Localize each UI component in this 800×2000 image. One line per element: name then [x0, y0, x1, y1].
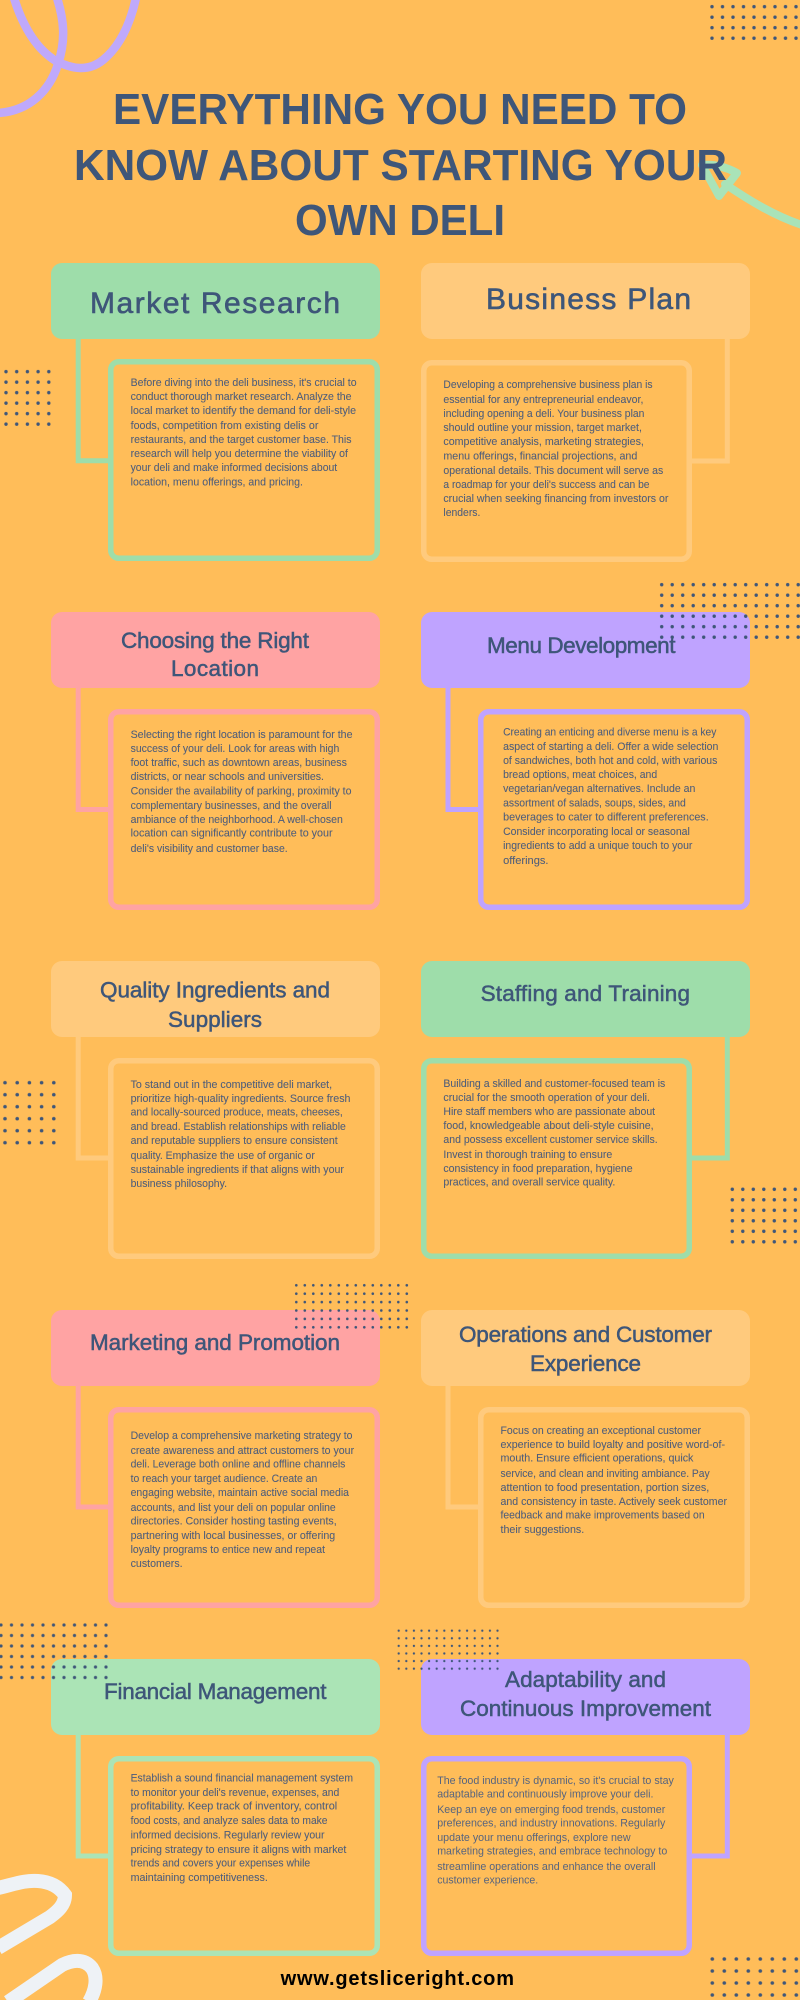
- title: OWN DELI: [295, 197, 505, 245]
- title: EVERYTHING YOU NEED TO: [113, 86, 687, 134]
- text block: quality ingredients: and locally-sourced produce, meats, cheeses,: [131, 1107, 343, 1119]
- text block: staffing and training: crucial for the smooth operation of your deli.: [443, 1092, 650, 1104]
- text block: quality ingredients: business philosophy.: [131, 1178, 227, 1190]
- text block: menu development: Creating an enticing and diverse menu is a key: [503, 727, 717, 739]
- heading: operations and customer experience: [421, 1310, 750, 1386]
- text block: business plan: essential for any entrepreneurial endeavor,: [443, 394, 643, 406]
- text block: marketing: directories. Consider hosting tasting events,: [131, 1516, 337, 1528]
- heading: menu development: [421, 612, 750, 688]
- text block: menu development: assortment of salads, soups, sides, and: [503, 798, 686, 810]
- text block: menu development: ingredients to add a unique touch to your: [503, 840, 693, 852]
- text block: location: ambiance of the neighborhood. A well-chosen: [131, 814, 343, 826]
- text block: financial management: to monitor your deli's revenue, expenses, and: [131, 1787, 339, 1799]
- heading: adaptability and continuous improvement: Continuous Improvement: [460, 1696, 712, 1721]
- title: [74, 86, 727, 245]
- panel: business plan: [421, 263, 750, 559]
- text block: quality ingredients: To stand out in the competitive deli market,: [131, 1079, 332, 1091]
- heading: adaptability and continuous improvement: Adaptability and: [505, 1667, 666, 1692]
- text block: business plan: lenders.: [443, 507, 480, 519]
- text block: operations: experience to build loyalty and positive word-of-: [500, 1439, 725, 1451]
- text block: operations: service, and clean and inviting ambiance. Pay: [500, 1468, 710, 1480]
- decoration: dot grid over menu heading: [656, 579, 800, 642]
- text block: location: [111, 712, 377, 907]
- connector: [448, 1386, 480, 1507]
- text block: menu development: bread options, meat choices, and: [503, 769, 657, 781]
- text block: financial management: profitability. Keep track of inventory, control: [131, 1801, 337, 1813]
- text block: adaptability: [424, 1759, 689, 1953]
- text block: operations: attention to food presentation, portion sizes,: [500, 1482, 709, 1494]
- text block: operations: [481, 1410, 747, 1605]
- text block: staffing and training: Invest in thorough training to ensure: [443, 1149, 612, 1161]
- text block: market research: research will help you determine the viability of: [131, 448, 349, 460]
- text block: staffing and training: consistency in food preparation, hygiene: [443, 1163, 633, 1175]
- text block: quality ingredients: quality. Emphasize the use of organic or: [131, 1150, 315, 1162]
- decoration: dot grid top right: [707, 1, 800, 43]
- text block: menu development: offerings.: [503, 855, 548, 867]
- text block: financial management: pricing strategy to ensure it aligns with market: [131, 1844, 347, 1856]
- text block: market research: foods, competition from existing delis or: [131, 420, 319, 432]
- heading: quality ingredients and suppliers: [51, 961, 380, 1037]
- text block: location: success of your deli. Look for areas with high: [131, 743, 339, 755]
- text block: location: foot traffic, such as downtown areas, business: [131, 757, 347, 769]
- text block: financial management: Establish a sound financial management system: [131, 1773, 353, 1785]
- panel: quality ingredients and suppliers: [51, 961, 380, 1256]
- heading: business plan: Business Plan: [486, 283, 691, 316]
- text block: market research: conduct thorough market research. Analyze the: [131, 391, 352, 403]
- heading: choosing the right location: [51, 612, 380, 688]
- text block: location: districts, or near schools and universities.: [131, 771, 324, 783]
- text block: adaptability: adaptable and continuously improve your deli.: [437, 1789, 654, 1801]
- text block: market research: Before diving into the deli business, it's crucial to: [131, 377, 357, 389]
- text block: quality ingredients: and bread. Establish relationships with reliable: [131, 1121, 346, 1133]
- text block: location: Consider the availability of parking, proximity to: [131, 786, 352, 798]
- text block: menu development: vegetarian/vegan alternatives. Include an: [503, 783, 695, 795]
- heading: menu development: Menu Development: [487, 633, 676, 658]
- connector: [78, 1037, 110, 1158]
- text block: location: Selecting the right location is paramount for the: [131, 729, 352, 741]
- text block: adaptability: customer experience.: [437, 1875, 538, 1887]
- text block: operations: feedback and make improvements based on: [500, 1510, 705, 1522]
- decoration: white brush strokes: [0, 1881, 96, 2000]
- decoration: green arrow: [702, 165, 800, 225]
- text block: business plan: should outline your mission, target market,: [443, 422, 642, 434]
- decoration: dot grid over marketing heading: [292, 1281, 411, 1332]
- text block: marketing: engaging website, maintain active social media: [131, 1487, 350, 1499]
- text block: adaptability: streamline operations and enhance the overall: [437, 1861, 656, 1873]
- text block: location: complementary businesses, and the overall: [131, 800, 332, 812]
- text block: market research: location, menu offerings, and pricing.: [131, 477, 303, 489]
- panel: operations and customer experience: [421, 1310, 750, 1605]
- text block: staffing and training: Hire staff members who are passionate about: [443, 1106, 656, 1118]
- decoration: dot grid right lower: [727, 1184, 800, 1247]
- heading: staffing and training: Staffing and Training: [481, 981, 690, 1006]
- text block: staffing and training: food, knowledgeable about deli-style cuisine,: [443, 1120, 654, 1132]
- text block: operations: Focus on creating an exceptional customer: [500, 1425, 701, 1437]
- panel: choosing the right location: [51, 612, 380, 907]
- heading: choosing the right location: Choosing the Right: [121, 628, 310, 653]
- text block: marketing: deli. Leverage both online and offline channels: [131, 1459, 346, 1471]
- text block: quality ingredients: prioritize high-quality ingredients. Source fresh: [131, 1093, 350, 1105]
- heading: business plan: [421, 263, 750, 339]
- decoration: dot grid over adaptability heading: [395, 1627, 501, 1672]
- text block: marketing: accounts, and list your deli on popular online: [131, 1502, 336, 1514]
- text block: quality ingredients: [111, 1061, 377, 1256]
- text block: staffing and training: practices, and overall service quality.: [443, 1177, 615, 1189]
- panel: menu development: [421, 612, 750, 907]
- panel: staffing and training: [421, 961, 750, 1256]
- text block: adaptability: update your menu offerings, explore new: [437, 1832, 631, 1844]
- text block: menu development: Consider incorporating local or seasonal: [503, 826, 690, 838]
- text block: quality ingredients: and reputable suppliers to ensure consistent: [131, 1135, 339, 1147]
- text block: marketing: Develop a comprehensive marketing strategy to: [131, 1430, 352, 1442]
- heading: staffing and training: [421, 961, 750, 1037]
- text block: market research: restaurants, and the target customer base. This: [131, 434, 352, 446]
- text block: business plan: including opening a deli. Your business plan: [443, 408, 644, 420]
- connector: [690, 339, 727, 461]
- connector: [690, 1735, 727, 1856]
- text block: business plan: a roadmap for your deli's success and can be: [443, 479, 650, 491]
- text block: marketing: create awareness and attract customers to your: [131, 1445, 354, 1457]
- connector: [690, 1037, 727, 1158]
- decoration: dot grid left lower: [0, 1077, 60, 1149]
- text block: business plan: competitive analysis, marketing strategies,: [443, 436, 644, 448]
- text block: market research: [111, 362, 377, 558]
- decoration: dot grid left: [1, 366, 54, 429]
- text block: financial management: food costs, and analyze sales data to make: [131, 1815, 328, 1827]
- text block: financial management: trends and covers your expenses while: [131, 1858, 310, 1870]
- text block: marketing: to reach your target audience. Create an: [131, 1473, 317, 1485]
- text block: adaptability: preferences, and industry innovations. Regularly: [437, 1818, 666, 1830]
- decoration: dot grid over financial heading: [0, 1620, 111, 1683]
- text block: business plan: menu offerings, financial projections, and: [443, 450, 637, 462]
- heading: marketing and promotion: Marketing and Promotion: [90, 1330, 340, 1355]
- text block: financial management: [111, 1759, 377, 1953]
- heading: market research: [51, 263, 380, 339]
- text block: menu development: [481, 712, 747, 907]
- heading: quality ingredients and suppliers: Suppliers: [168, 1007, 262, 1032]
- heading: financial management: Financial Management: [104, 1679, 327, 1704]
- text block: business plan: crucial when seeking financing from investors or: [443, 493, 669, 505]
- heading: marketing and promotion: [51, 1310, 380, 1386]
- decoration: purple scribble: [0, 0, 136, 113]
- heading: operations and customer experience: Experience: [530, 1351, 641, 1376]
- text block: menu development: beverages to cater to different preferences.: [503, 812, 709, 824]
- heading: financial management: [51, 1659, 380, 1735]
- text block: adaptability: marketing strategies, and embrace technology to: [437, 1846, 667, 1858]
- website footer: www.getsliceright.com: [280, 1968, 514, 1990]
- connector: [78, 688, 110, 810]
- panel: market research: [51, 263, 380, 558]
- text block: location: deli's visibility and customer base.: [131, 843, 288, 855]
- title: KNOW ABOUT STARTING YOUR: [74, 142, 727, 190]
- text block: staffing and training: and possess excellent customer service skills.: [443, 1134, 658, 1146]
- text block: market research: your deli and make informed decisions about: [131, 462, 338, 474]
- text block: marketing: partnering with local businesses, or offering: [131, 1530, 335, 1542]
- connector: [448, 688, 480, 810]
- text block: operations: and consistency in taste. Actively seek customer: [500, 1496, 727, 1508]
- text block: marketing: [111, 1410, 377, 1605]
- panel: marketing and promotion: [51, 1310, 380, 1605]
- panel: financial management: [51, 1659, 380, 1953]
- connector: [78, 1386, 110, 1507]
- text block: operations: mouth. Ensure efficient operations, quick: [500, 1453, 694, 1465]
- text block: marketing: loyalty programs to entice new and repeat: [131, 1544, 326, 1556]
- heading: adaptability and continuous improvement: [421, 1659, 750, 1735]
- text block: business plan: [424, 363, 689, 559]
- text block: operations: their suggestions.: [500, 1524, 584, 1536]
- text block: staffing and training: [424, 1061, 689, 1256]
- heading: operations and customer experience: Operations and Customer: [459, 1322, 712, 1347]
- text block: adaptability: Keep an eye on emerging food trends, customer: [437, 1804, 665, 1816]
- text block: financial management: informed decisions. Regularly review your: [131, 1830, 325, 1842]
- heading: market research: Market Research: [90, 287, 340, 320]
- text block: menu development: aspect of starting a deli. Offer a wide selection: [503, 741, 718, 753]
- text block: location: location can significantly contribute to your: [131, 828, 333, 840]
- heading: choosing the right location: Location: [171, 656, 259, 681]
- text block: quality ingredients: sustainable ingredients if that aligns with your: [131, 1164, 344, 1176]
- text block: business plan: Developing a comprehensive business plan is: [443, 379, 653, 391]
- text block: marketing: customers.: [131, 1558, 183, 1570]
- decoration: dot grid bottom right: [706, 1953, 800, 2000]
- text block: business plan: operational details. This document will serve as: [443, 465, 664, 477]
- text block: staffing and training: Building a skilled and customer-focused team is: [443, 1078, 666, 1090]
- connector: [78, 1735, 110, 1856]
- connector: [78, 339, 110, 461]
- heading: quality ingredients and suppliers: Quality Ingredients and: [100, 977, 330, 1002]
- text block: menu development: of sandwiches, both hot and cold, with various: [503, 755, 718, 767]
- text block: market research: local market to identify the demand for deli-style: [131, 405, 356, 417]
- panel: adaptability and continuous improvement: [421, 1659, 750, 1953]
- text block: adaptability: The food industry is dynamic, so it's crucial to stay: [437, 1775, 674, 1787]
- text block: financial management: maintaining competitiveness.: [131, 1872, 268, 1884]
